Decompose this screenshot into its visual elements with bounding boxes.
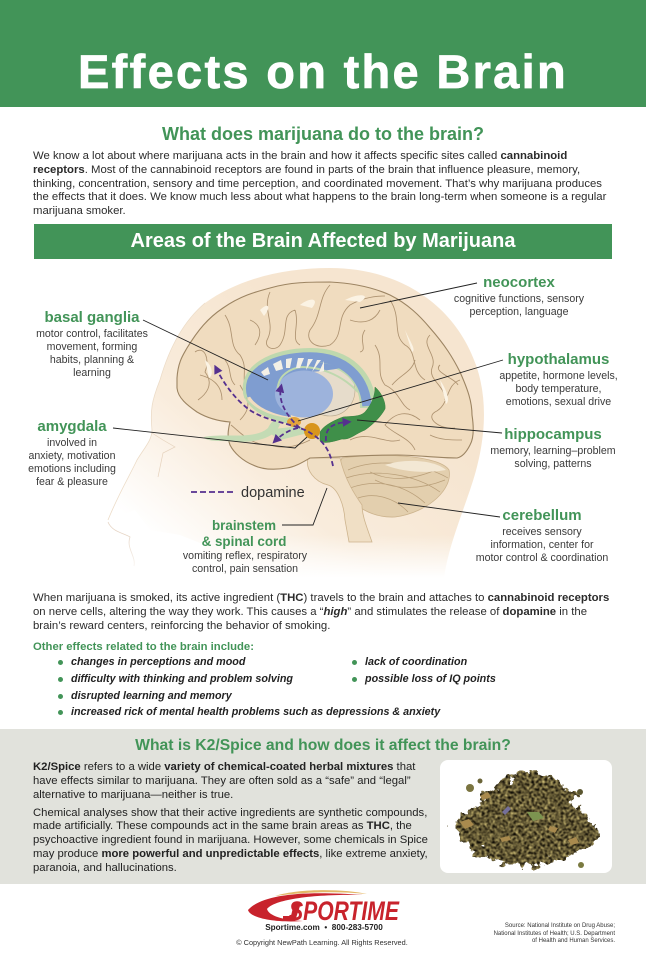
logo: Sportime — [248, 890, 400, 925]
cerebrum — [177, 282, 473, 469]
label: amygdala: fear & pleasure — [36, 476, 108, 488]
label: hypothalamus: hypothalamus — [508, 351, 609, 368]
label: basal ganglia — [36, 309, 148, 379]
label: hypothalamus — [499, 351, 618, 408]
section banner: areas of the brain: Areas of the Brain Affected by Marijuana — [131, 230, 515, 252]
label: brainstem and spinal cord: vomiting reflex, respiratory — [183, 550, 307, 562]
panel: K2/Spice — [0, 729, 646, 884]
K2 text block 1: have effects similar to marijuana. They are often sold as a “safe” and “legal” — [33, 775, 411, 787]
head silhouette — [100, 268, 500, 578]
label: basal ganglia: basal ganglia — [44, 309, 140, 326]
footer source — [494, 922, 615, 944]
label: brainstem and spinal cord: control, pain sensation — [192, 563, 298, 575]
label: brainstem and spinal cord: & spinal cord — [202, 534, 286, 549]
dopamine legend — [191, 485, 305, 501]
K2 text block 2: may produce more powerful and unpredictable effects, like extreme anxiety, — [33, 848, 428, 860]
footer source: National Institutes of Health; U.S. Department — [494, 931, 615, 937]
K2 text block 2: paranoia, and hallucinations. — [33, 862, 177, 874]
label: neocortex — [454, 274, 584, 318]
label: brainstem and spinal cord: brainstem — [212, 518, 276, 533]
label: basal ganglia: habits, planning & — [50, 354, 134, 366]
label: neocortex: cognitive functions, sensory — [454, 293, 584, 305]
title banner — [0, 0, 646, 107]
bullet list: possible loss of IQ points — [365, 673, 496, 685]
intro paragraph: marijuana smoker. — [33, 205, 126, 217]
K2 text block 1: alternative to marijuana—neither is true. — [33, 789, 233, 801]
footer copyright: © Copyright NewPath Learning. All Rights Reserved. — [236, 938, 408, 947]
THC paragraph: When marijuana is smoked, its active ingredient (THC) travels to the brain and attaches to cannabinoid receptors — [33, 592, 609, 604]
hypothalamus — [287, 417, 301, 427]
K2 text block 2: made artificially. These compounds act in the same brain areas as THC, the — [33, 820, 412, 832]
basal ganglia blue — [247, 357, 367, 418]
label: basal ganglia: learning — [73, 367, 111, 379]
footer source: Source: National Institute on Drug Abuse; — [505, 923, 615, 929]
label: cerebellum: information, center for — [490, 539, 594, 551]
label: cerebellum: cerebellum — [502, 507, 582, 524]
THC paragraph — [33, 592, 609, 632]
intro paragraph — [33, 150, 606, 217]
thalamus — [305, 364, 355, 416]
bullet list: disrupted learning and memory — [71, 690, 232, 702]
label: hypothalamus: emotions, sexual drive — [506, 396, 611, 408]
label: neocortex: neocortex — [483, 274, 555, 291]
label: hypothalamus: appetite, hormone levels, — [499, 370, 618, 382]
label: hypothalamus: body temperature, — [516, 383, 601, 395]
label: hippocampus: memory, learning–problem — [490, 445, 616, 457]
bullet list: lack of coordination — [365, 656, 467, 668]
bullet list — [58, 656, 496, 718]
dopamine legend: dopamine — [241, 485, 305, 501]
label: amygdala: involved in — [47, 437, 97, 449]
K2 text block 2: psychoactive ingredient found in marijuana. However, some chemicals in Spice — [33, 834, 428, 846]
label: amygdala: anxiety, motivation — [29, 450, 115, 462]
heading: what does marijuana do: What does marijuana do to the brain? — [162, 124, 484, 144]
K2 text block 1 — [33, 761, 416, 801]
label: hippocampus: hippocampus — [504, 426, 602, 443]
label: amygdala: emotions including — [28, 463, 116, 475]
intro paragraph: We know a lot about where marijuana acts in the brain and how it affects specific sites called cannabinoid — [33, 150, 567, 162]
K2 text block 1: K2/Spice refers to a wide variety of chemical-coated herbal mixtures that — [33, 761, 415, 773]
label: cerebellum: receives sensory — [502, 526, 582, 538]
cerebellum — [339, 455, 449, 517]
footer source: of Health and Human Services. — [532, 938, 615, 944]
label: amygdala: amygdala — [37, 418, 107, 435]
intro paragraph: receptors. Most of the cannabinoid receptors are found in parts of the brain that influence pleasure, memory, — [33, 164, 580, 176]
bullet list: changes in perceptions and mood — [71, 656, 245, 668]
label: hippocampus — [490, 426, 616, 470]
intro paragraph: the effects that it does. We know much less about what happens to the brain long-term when someone is a regular — [33, 191, 606, 203]
K2 heading: What is K2/Spice and how does it affect the brain? — [135, 737, 511, 754]
label: cerebellum: motor control & coordination — [476, 552, 608, 564]
label: basal ganglia: motor control, facilitates — [36, 328, 148, 340]
section banner: areas of the brain — [34, 224, 612, 259]
limbic green halo — [204, 356, 368, 442]
bullet list: increased rick of mental health problems such as depressions & anxiety — [71, 706, 440, 718]
label: hippocampus: solving, patterns — [514, 458, 592, 470]
THC paragraph: brain’s reward centers, reinforcing the behavior of smoking. — [33, 620, 330, 632]
amygdala — [304, 423, 320, 439]
THC paragraph: on nerve cells, altering the way they work. This causes a “high” and stimulates the release of dopamine in the — [33, 606, 587, 618]
brainstem — [307, 458, 372, 542]
label: basal ganglia: movement, forming — [47, 341, 137, 353]
other effects heading: Other effects related to the brain include: — [33, 641, 254, 653]
title banner: Effects on the Brain — [78, 45, 568, 98]
hippocampus dark green — [320, 387, 385, 442]
photo: herbal mixture — [440, 760, 612, 873]
label: brainstem and spinal cord — [183, 518, 307, 575]
dopamine pathways — [216, 368, 348, 466]
intro paragraph: thinking, concentration, sensory and time perception, and coordinated movement. That’s why marijuana produces — [33, 178, 602, 190]
bullet list: difficulty with thinking and problem solving — [71, 673, 293, 685]
footer contact: Sportime.com • 800-283-5700 — [265, 923, 383, 932]
label: cerebellum — [476, 507, 608, 564]
callout lines — [113, 283, 503, 525]
label: amygdala — [28, 418, 116, 488]
label: neocortex: perception, language — [470, 306, 568, 318]
K2 text block 2: Chemical analyses show that their active ingredients are synthetic compounds, — [33, 806, 427, 818]
K2 text block 2 — [33, 806, 428, 874]
